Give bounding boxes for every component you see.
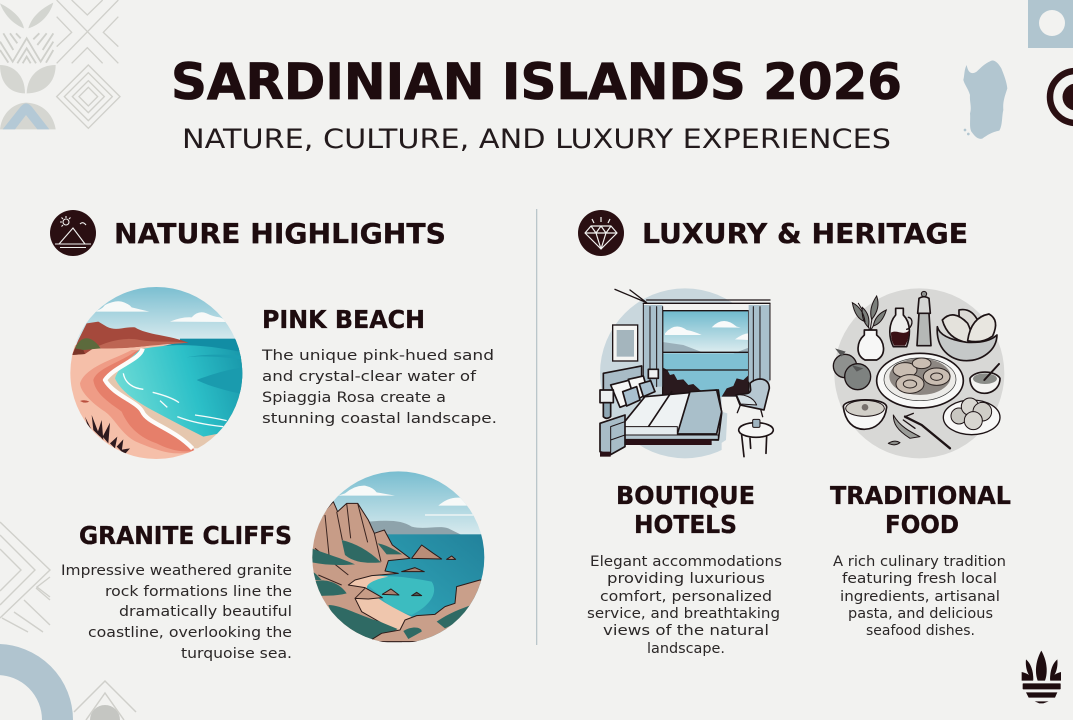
text: granite cliffs: coastline, overlooking the <box>88 625 292 641</box>
text: boutique hotels: providing luxurious <box>607 571 765 587</box>
text: boutique hotels: Elegant accommodations <box>590 554 782 570</box>
main plate <box>877 353 963 408</box>
tomatoes <box>833 348 871 390</box>
icon: bottom-right logo <box>1022 651 1061 703</box>
text: pink beach: and crystal-clear water of <box>262 369 477 385</box>
panel: luxury and heritage <box>578 210 1011 657</box>
illustration: granite cliffs <box>312 471 484 642</box>
heading: nature highlights: NATURE HIGHLIGHTS <box>114 217 446 250</box>
text: pink beach <box>261 305 497 427</box>
decoration: bullseye <box>1050 71 1073 123</box>
decoration: top-left geometric pattern <box>0 0 120 129</box>
text: traditional food: FOOD <box>885 510 959 539</box>
illustration: boutique hotel room <box>600 288 777 463</box>
cutlery and herbs <box>888 413 950 448</box>
text: granite cliffs: Impressive weathered granite <box>61 563 292 579</box>
foreground rocks right <box>372 580 482 642</box>
text: traditional food: ingredients, artisanal <box>840 589 1000 605</box>
text: pink beach: stunning coastal landscape. <box>262 411 497 427</box>
small sauce bowl <box>970 364 1000 393</box>
text: traditional food: seafood dishes. <box>866 623 975 639</box>
decoration: bottom-left arch <box>0 659 58 720</box>
icon: mountain and sun <box>50 210 96 256</box>
panel: nature highlights <box>50 210 498 662</box>
soup bowl <box>843 400 887 429</box>
dumpling plate <box>943 398 1000 435</box>
subtitle: NATURE, CULTURE, AND LUXURY EXPERIENCES <box>182 124 891 155</box>
heading: luxury and heritage: LUXURY & HERITAGE <box>642 217 968 250</box>
bread bowl <box>937 310 997 361</box>
vase and herbs <box>852 296 886 360</box>
decoration: bottom-left chevrons <box>0 522 50 632</box>
armchair <box>736 379 769 417</box>
icon: Sardinia island map <box>963 60 1007 139</box>
text: granite cliffs: GRANITE CLIFFS <box>79 521 292 550</box>
text: traditional food: A rich culinary tradition <box>833 554 1006 570</box>
pepper mill <box>917 291 931 346</box>
text: boutique hotels: BOUTIQUE <box>616 481 755 510</box>
text: boutique hotels <box>587 481 782 657</box>
text: traditional food: pasta, and delicious <box>848 606 993 622</box>
text: boutique hotels: HOTELS <box>634 510 737 539</box>
decoration: top-right square with circle <box>1028 0 1073 48</box>
text: boutique hotels: comfort, personalized <box>600 589 772 605</box>
text: boutique hotels: landscape. <box>647 641 725 657</box>
title: SARDINIAN ISLANDS 2026 <box>171 53 902 111</box>
text: pink beach: PINK BEACH <box>262 305 425 334</box>
text: boutique hotels: service, and breathtaking <box>587 606 780 622</box>
text: traditional food: TRADITIONAL <box>830 481 1011 510</box>
text: granite cliffs: rock formations line the <box>105 584 292 600</box>
main cliff mass <box>305 502 410 642</box>
oil bottle <box>890 308 912 347</box>
text: traditional food: featuring fresh local <box>842 571 997 587</box>
illustration: pink beach <box>70 287 242 459</box>
divider <box>536 209 537 645</box>
decoration: bottom triangle with dot <box>74 681 136 720</box>
text: boutique hotels: views of the natural <box>603 623 769 639</box>
text: granite cliffs: turquoise sea. <box>181 646 292 662</box>
text: granite cliffs: dramatically beautiful <box>119 604 292 620</box>
text: pink beach: Spiaggia Rosa create a <box>262 390 446 406</box>
icon: diamond <box>578 210 624 256</box>
text: pink beach: The unique pink-hued sand <box>261 348 494 364</box>
illustration: traditional food <box>833 288 1004 458</box>
text: traditional food <box>830 481 1011 639</box>
text: granite cliffs <box>61 521 292 662</box>
